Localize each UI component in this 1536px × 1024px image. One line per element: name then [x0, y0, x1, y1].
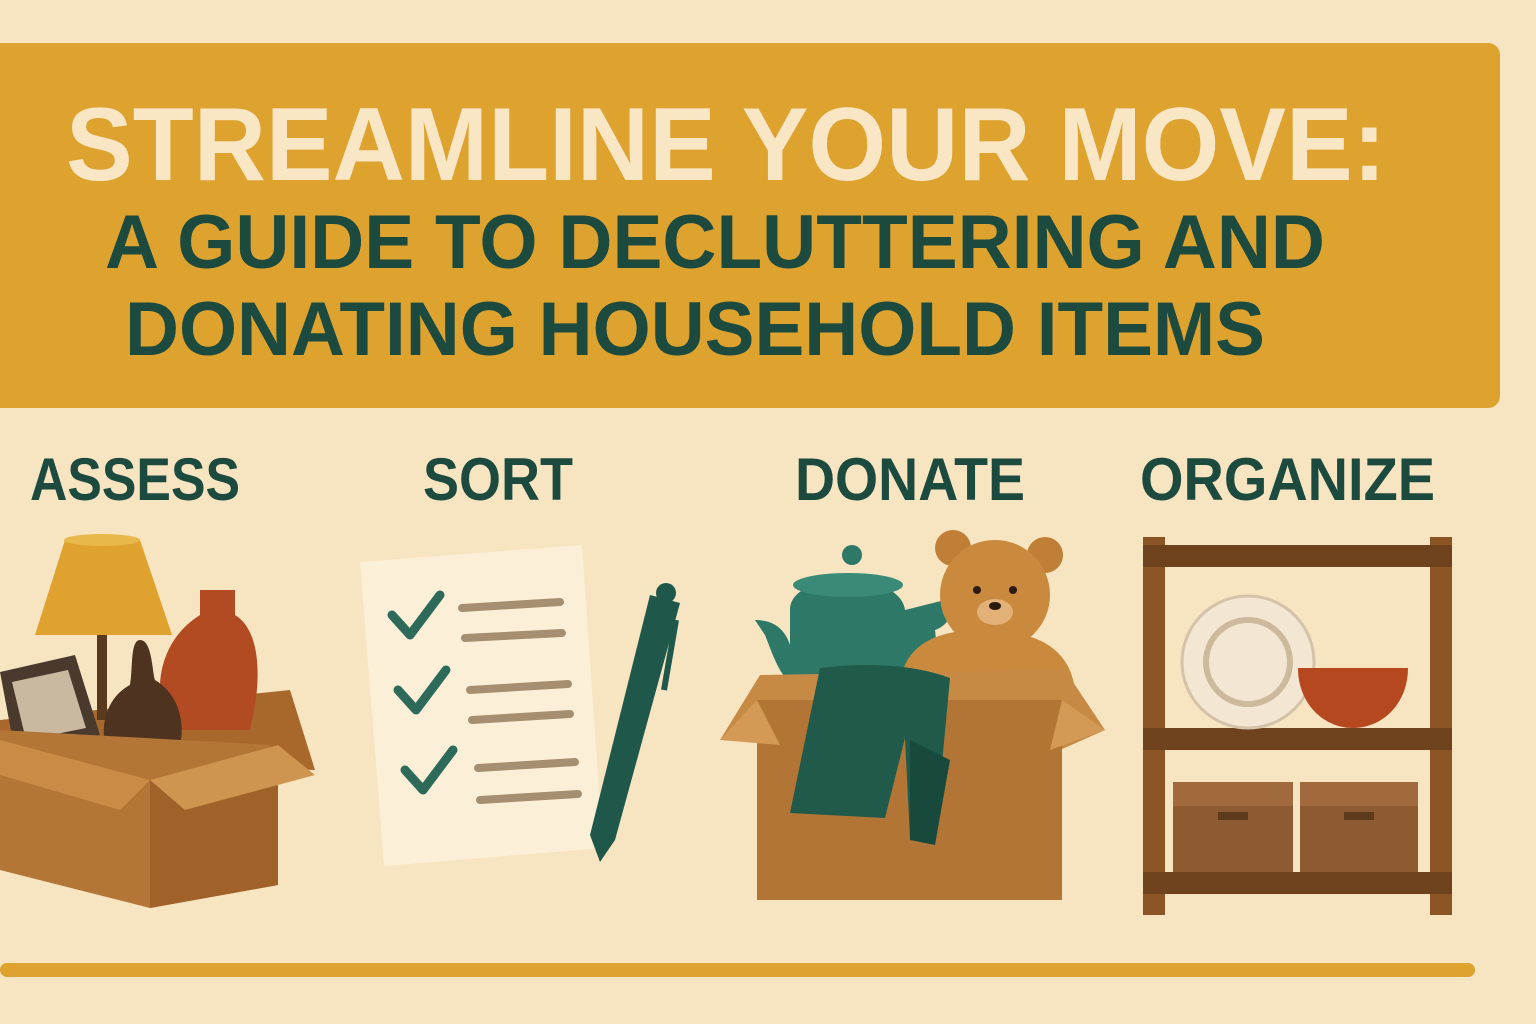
- step label: organize: ORGANIZE: [1140, 446, 1435, 513]
- icon: checklist and pen: [360, 545, 680, 866]
- step label: assess: ASSESS: [30, 446, 240, 513]
- step label: donate: DONATE: [795, 446, 1025, 513]
- icon: donation box: [720, 530, 1105, 900]
- subtitle: A GUIDE TO DECLUTTERING AND: [105, 200, 1325, 285]
- step label: sort: SORT: [423, 446, 573, 513]
- title: STREAMLINE YOUR MOVE:: [66, 87, 1386, 203]
- icon: shelf: [1143, 537, 1452, 915]
- title banner: [0, 43, 1500, 408]
- subtitle: DONATING HOUSEHOLD ITEMS: [125, 287, 1265, 372]
- subtitle: [105, 200, 1325, 372]
- icon: assess box with items: [0, 534, 315, 908]
